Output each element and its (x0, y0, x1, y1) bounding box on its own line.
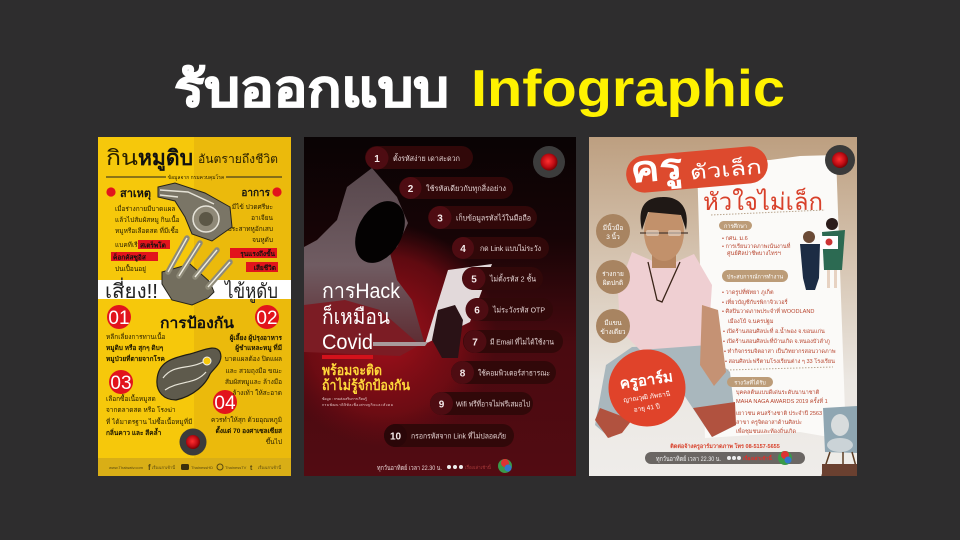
prevention text: ตั้งแต่ 70 องศาเซลเซียส (215, 425, 282, 435)
poster heading: กิน (106, 147, 138, 170)
education section: ศูนย์ศิลปาชีพบางไทรฯ (727, 249, 781, 257)
awards section: สาขา ครูจิตอาสาด้านศิลปะ (736, 419, 802, 426)
item 7: มี Email ที่ไม่ได้ใช้งาน (490, 336, 554, 346)
contact line: ติดต่อจ้างครูอาร์มวาดภาพ โทร 08-5157-5655 (670, 442, 780, 451)
poster heading (106, 147, 282, 181)
headline: ตัวเล็ก (689, 153, 763, 185)
risk banner: ไข้หูดับ (223, 280, 278, 304)
experience section (722, 270, 836, 365)
panel: hacking poster (304, 137, 576, 476)
headline: ถ้าไม่รู้จักป้องกัน (322, 376, 410, 394)
item 5: ไม่ตั้งรหัส 2 ชั้น (489, 274, 536, 284)
item 10 (384, 424, 514, 447)
fact badges (596, 214, 630, 343)
prevention text: ควรทำให้สุก ด้วยอุณหภูมิ (211, 416, 282, 424)
prevention text: ผู้เลี้ยง ผู้ปรุงอาหาร (230, 332, 282, 343)
name circle: ญาณวุฒิ ภัพธานี (623, 390, 671, 404)
footer pill: ทุกวันอาทิตย์ เวลา 22.30 น. (656, 455, 721, 463)
experience section: ประสบการณ์การทำงาน (727, 274, 783, 280)
item 3: 3 (437, 214, 443, 224)
poster heading: ข้อมูลจาก กรมควบคุมโรค (168, 174, 224, 181)
title: Infographic (471, 60, 785, 118)
item 4: กด Link แบบไม่ระวัง (480, 244, 541, 253)
item 7: 7 (472, 338, 478, 348)
headline: การHack (322, 280, 400, 303)
hooded hacker (304, 168, 425, 356)
students photo (800, 218, 845, 290)
prevention text: ล้างเท้า ให้สะอาด (233, 389, 282, 397)
item 4: 4 (460, 244, 466, 255)
fact badges: 3 นิ้ว (606, 232, 620, 241)
prevention text: และ สวมถุงมือ ขณะ (226, 367, 282, 375)
experience section: เมืองโบ้ จ.นครปฐม (728, 317, 774, 325)
icon: channel logo (825, 145, 855, 175)
headline: ข้อมูล : กรมส่งเสริมการเรียนรู้ (322, 396, 367, 401)
footer: เรื่องเล่าเช้านี้ (465, 464, 492, 470)
item 1 (365, 146, 473, 170)
prevention text: ที่ ได้มาตรฐาน ไม่ซื้อเนื้อหมูที่มี (106, 417, 192, 426)
experience section: • ทำกิจกรรมจิตอาสา เป็นวิทยากรสอนวาดภาพ (724, 347, 836, 355)
education section (711, 210, 825, 257)
icon: channel logo (533, 146, 565, 178)
fact badges: ผิดปกติ (603, 279, 623, 287)
prevention text: บาดแผลต้อง ปิดแผล (225, 355, 282, 363)
causes text: ปนเปื้อนอยู่ (115, 264, 146, 273)
number badges: 04 (214, 393, 236, 414)
item 10: กรอกรหัสจาก Link ที่ไม่ปลอดภัย (411, 430, 506, 440)
icon: pork steak (157, 348, 221, 400)
item 9: Wifi ฟรีที่อาจไม่ฟรีเสมอไป (456, 398, 530, 408)
item 5 (462, 267, 543, 290)
prevention text: หลีกเลี่ยงการทานเนื้อ (106, 332, 166, 341)
laptop (373, 264, 492, 358)
paper sheet (697, 155, 846, 440)
experience section: • สอนศิลปะฟรีตามโรงเรียนต่าง ๆ 33 โรงเรียน (725, 357, 835, 365)
number badges: 02 (256, 308, 278, 329)
headline: ครู (629, 145, 685, 194)
item 6: 6 (474, 306, 480, 316)
awards section: เพื่อชุมชนและท้องถิ่นเกิด (736, 427, 796, 435)
awards section: เยาวชน คนสร้างชาติ ประจำปี 2563 (736, 410, 822, 417)
risk banner: เสี่ยง!! (105, 277, 158, 303)
prevention text: เลือกซื้อเนื้อหมูสด (106, 394, 156, 403)
prevention text: จากตลาดสด หรือ โรงฆ่า (106, 406, 176, 414)
footer bar: t (250, 465, 253, 472)
risk banner (98, 277, 291, 304)
footer bar: เรื่องเล่าเช้านี้ (152, 463, 176, 470)
item 8: ใช้คอมพิวเตอร์สาธารณะ (478, 368, 550, 378)
headline (626, 146, 822, 210)
panel: teacher poster (589, 137, 857, 476)
fact badges: มีนิ้วมือ (603, 223, 623, 232)
item 8 (451, 361, 556, 384)
name circle: อายุ 41 ปี (633, 402, 660, 414)
prevention text: สัมผัสหมูและ ล้างมือ (225, 378, 282, 386)
title: รับออกแบบ (174, 61, 449, 117)
causes text (106, 187, 180, 273)
awards section: บุคคลต้นแบบดีเด่นระดับนานาชาติ (736, 389, 820, 396)
poster heading: หมูดิบ (138, 147, 193, 172)
footer: ทุกวันอาทิตย์ เวลา 22.30 น. (377, 464, 442, 472)
item 8: 8 (460, 368, 466, 380)
item 7 (463, 330, 563, 353)
icon: channel logo (180, 428, 206, 456)
education section: • การเรียนวาดภาพเน้นงานที่ (722, 242, 791, 250)
footer bar: ThainessTV (225, 465, 247, 470)
name circle (608, 350, 686, 426)
causes text: ค็อกคัสซูอิส (113, 252, 146, 262)
tiger painting and easel (822, 406, 857, 476)
awards section: รางวัลที่ได้รับ (734, 378, 766, 386)
symptoms text: อาเจียน (251, 214, 274, 222)
item 2: ใช้รหัสเดียวกับทุกสิ่งอย่าง (426, 183, 506, 193)
headline: ก็เหมือน (322, 303, 390, 329)
causes text: แบคทีเรีย (115, 241, 142, 249)
footer bar: f (148, 463, 151, 472)
causes text: เมื่อร่างกายมีบาดแผล (115, 204, 175, 213)
footer bar: เรื่องเล่าเช้านี้ (258, 463, 282, 470)
headline: Covid (322, 331, 373, 354)
symptoms text: รุนแรงถึงขั้น (240, 248, 276, 258)
symptoms text: ประสาทหูอักเสบ (228, 225, 273, 233)
causes text: สาเหตุ (120, 188, 151, 201)
item 10: 10 (390, 432, 401, 442)
symptoms text: อาการ (241, 188, 271, 199)
item 3: เก็บข้อมูลรหัสไว้ในมือถือ (456, 212, 531, 222)
item 1: 1 (374, 154, 380, 165)
prevention text: ผู้ชำแหละหมู ที่มี (235, 342, 282, 353)
symptoms text: จนหูดับ (252, 236, 273, 244)
icon: pork bone (158, 183, 232, 241)
symptoms text: เสียชีวิต (254, 264, 276, 272)
awards section (727, 367, 833, 435)
prevention text (106, 332, 282, 446)
number badges: 01 (108, 308, 130, 329)
poster heading: อันตรายถึงชีวิต (198, 152, 278, 166)
footer bar: www.Thaiwatv.com (109, 465, 144, 470)
causes text: แล้วไปสัมผัสหมู กินเนื้อ (115, 215, 180, 224)
icon: pork ribs (162, 238, 230, 305)
experience section: • เปิดร้านสอนศิลปะที่ อ.น้ำพอง จ.ขอนแก่น (723, 327, 825, 335)
teacher photo (595, 197, 736, 438)
footer pill (645, 451, 805, 465)
item 6 (466, 298, 553, 321)
panel: raw pork poster (98, 137, 291, 476)
education section: การศึกษา (724, 223, 747, 230)
fact badges: มีแขน (604, 319, 622, 327)
item 2 (399, 177, 513, 199)
item 6: ไม่ระวังรหัส OTP (492, 306, 545, 314)
causes text: สเตร็พโต (140, 240, 166, 250)
prevention text: กลิ่นคาว และ สีคล้ำ (106, 427, 162, 437)
prevention text: หมูดิบ หรือ สุกๆ ดิบๆ (106, 344, 164, 353)
item 3 (428, 206, 537, 229)
item 2: 2 (408, 184, 414, 195)
experience section: • วาดรูปที่พัทยา ภูเก็ต (722, 288, 774, 296)
name circle: ครูอาร์ม (619, 367, 674, 394)
item 9: 9 (439, 400, 445, 410)
item 9 (430, 392, 533, 415)
headline: พร้อมจะติด (322, 362, 382, 378)
headline (322, 280, 410, 407)
item 1: ตั้งรหัสง่าย เดาสะดวก (393, 153, 460, 163)
prevention text: ขึ้นไป (266, 437, 282, 446)
footer (377, 459, 512, 473)
headline: หัวใจไม่เล็ก (703, 187, 823, 216)
headline: กรมพัฒนาดิจิทัลเพื่อเศรษฐกิจและสังคม (322, 402, 393, 407)
list pills (365, 146, 563, 447)
footer bar: ThainessHD (191, 465, 213, 470)
prevention text: หมูป่วยที่ตายจากโรค (106, 353, 165, 364)
item 4 (452, 237, 549, 259)
causes text: หมูหรือเลือดสด ที่มีเชื้อ (115, 226, 179, 235)
number badges: 03 (110, 373, 132, 394)
experience section: • ศิลปินวาดภาพประจำที่ WOODLAND (722, 307, 814, 315)
fact badges: ร่างกาย (602, 271, 624, 278)
fact badges: ข้างเดียว (600, 328, 626, 336)
education section: • กศน. ม.6 (722, 235, 748, 242)
footer pill: เรื่องเล่าเช้านี้ (743, 453, 773, 462)
footer bar (98, 458, 291, 476)
experience section: • เปิดร้านสอนศิลปะที่บ้านเกิด จ.หนองบัวลำภู (723, 337, 830, 345)
title (174, 60, 785, 118)
symptoms text: มีไข้ ปวดศรีษะ (232, 203, 273, 211)
number badges (107, 305, 279, 414)
experience section: • เที่ยวบัญชีกับรพิกาจิวเวอรี่ (722, 298, 788, 306)
item 5: 5 (471, 274, 477, 286)
prevention heading: การป้องกัน (160, 315, 235, 332)
symptoms text (228, 187, 282, 272)
awards section: MAHA NAGA AWARDS 2019 ครั้งที่ 1 (736, 397, 828, 405)
